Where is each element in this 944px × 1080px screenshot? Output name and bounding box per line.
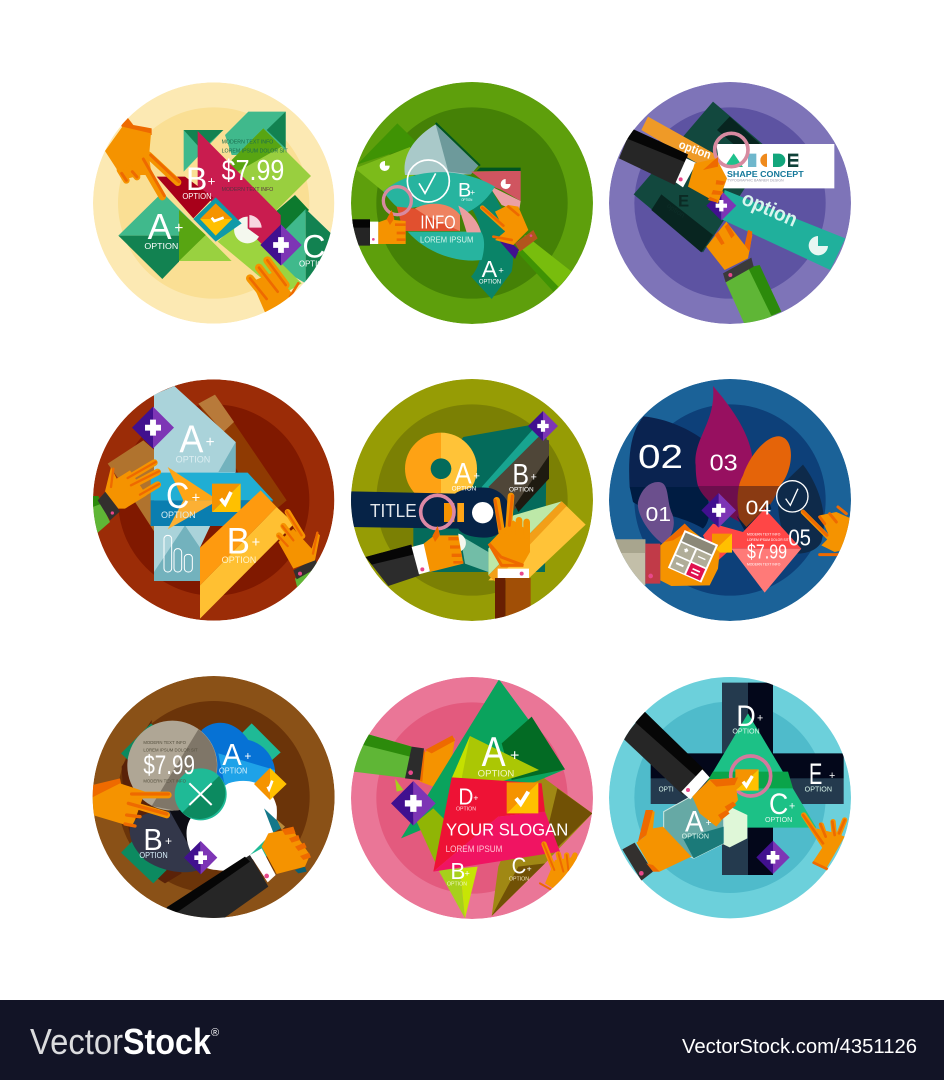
footer bar — [0, 1000, 944, 1080]
text labels: A — [454, 458, 472, 491]
blue band — [151, 473, 273, 526]
navy petal 02 — [629, 416, 709, 529]
text labels: B — [143, 823, 163, 857]
text labels — [659, 700, 835, 840]
top left folded band — [356, 124, 416, 192]
text labels: + — [527, 864, 532, 874]
text labels: E — [809, 758, 822, 791]
hand: top left pointing — [105, 118, 179, 197]
hand: left green sleeve — [88, 462, 159, 534]
text labels: C — [302, 229, 325, 265]
dark green square — [634, 102, 770, 252]
text labels: + — [206, 434, 215, 451]
text labels: C — [166, 475, 189, 516]
teal A+ strip — [471, 190, 513, 299]
text labels: A — [179, 418, 204, 462]
orange ribbon: option — [677, 137, 713, 162]
hand: black sleeve — [623, 712, 738, 827]
footer brand logo: Vector — [30, 1021, 123, 1062]
text labels: LOREM IPSUM DOLOR SIT — [222, 148, 288, 154]
panel: light blue circle with cross and triangle — [609, 676, 851, 918]
text labels: OPTION — [182, 192, 212, 201]
background disc — [93, 379, 334, 621]
panel: green circle with INFO leaves — [351, 82, 593, 324]
beige sleeve and red cuff — [610, 539, 660, 585]
text labels: OPTION — [139, 851, 168, 860]
crimson and green ribbon — [157, 131, 302, 295]
text labels: OPTION — [509, 486, 534, 493]
hand: bottom left — [622, 810, 691, 881]
magnifier ring — [715, 133, 748, 167]
text labels: OPTION — [176, 455, 210, 465]
text labels: B — [512, 458, 529, 491]
diamond C+ — [280, 209, 331, 283]
calculator — [668, 530, 718, 583]
grey petal — [404, 123, 480, 175]
text labels: D — [736, 700, 756, 733]
grey circle — [127, 721, 217, 811]
text labels: MODERN TEXT INFO — [222, 187, 273, 193]
icon: plus diamond — [528, 411, 558, 441]
text labels: 01 — [646, 503, 671, 526]
maroon petal 03 — [695, 386, 753, 522]
text labels: B — [458, 181, 471, 202]
hand: lower right — [540, 843, 578, 892]
icon: check square — [212, 484, 241, 512]
text labels: + — [531, 471, 537, 483]
diamond A+ — [118, 192, 206, 279]
red diamond — [703, 504, 801, 593]
navy TITLE banner: TITLE — [370, 500, 417, 521]
orange arrow — [168, 467, 218, 529]
icon: check square — [735, 769, 759, 791]
text labels: + — [789, 800, 795, 812]
green triangle — [680, 713, 816, 828]
background disc — [93, 676, 335, 918]
tan back band — [108, 440, 157, 535]
white half circle — [458, 534, 466, 552]
text labels: OPTI — [659, 786, 674, 793]
text labels — [139, 738, 251, 860]
background disc — [351, 379, 593, 621]
icon: plus diamond — [132, 407, 174, 449]
text labels: OPTION — [299, 260, 329, 269]
icon: plus diamond — [260, 224, 302, 266]
text labels: + — [165, 834, 172, 848]
hand: right pointing with green sleeve — [482, 205, 572, 292]
icon: plus diamond — [706, 191, 736, 221]
text labels: B — [186, 161, 207, 197]
teal ribbon: option — [738, 187, 801, 232]
text labels: A — [482, 728, 506, 775]
hand: right green sleeve — [278, 511, 325, 592]
green back shapes — [179, 112, 311, 261]
text labels — [446, 728, 568, 887]
background disc — [609, 676, 851, 918]
hand: right pointing — [803, 507, 851, 555]
text labels: + — [464, 869, 470, 879]
text labels: B — [450, 858, 465, 884]
hand with black sleeve and pen — [167, 827, 311, 923]
text labels: B — [227, 521, 250, 562]
hand: green sleeve — [706, 222, 781, 328]
lime triangles — [417, 736, 539, 918]
text labels: INFO — [420, 212, 456, 233]
text labels: OPTION — [509, 876, 529, 882]
big green triangle — [401, 679, 565, 838]
background disc — [609, 82, 851, 324]
text labels: OPTION — [765, 817, 792, 824]
text labels: OPTION — [144, 241, 178, 251]
text labels: + — [706, 818, 712, 829]
text labels: + — [498, 265, 504, 275]
icon: plus diamond large — [391, 781, 436, 826]
brown triangles — [492, 773, 592, 916]
text labels: MODERN TEXT INFO — [143, 779, 186, 785]
text labels: + — [192, 491, 200, 507]
text labels: 03 — [710, 450, 738, 476]
text labels: LOREM IPSUM — [420, 236, 473, 245]
hand: black sleeve thumbs up — [366, 526, 463, 586]
icon: bar pills — [164, 535, 192, 572]
panel: purple circle with shape concept banner — [609, 82, 851, 328]
text labels: + — [473, 793, 478, 803]
text labels: LOREM IPSUM DOLOR SIT — [143, 748, 198, 754]
text labels: $7.99 — [222, 155, 284, 187]
panel: brown circle with blobs — [92, 676, 335, 923]
text labels: MODERN TEXT INFO — [747, 563, 780, 567]
background disc — [351, 677, 593, 919]
salmon INFO panel — [397, 204, 460, 231]
dark teal back panel — [413, 424, 547, 572]
icon: white check ring — [407, 160, 449, 202]
green sleeve — [353, 733, 424, 780]
text labels: $7.99 — [747, 542, 787, 564]
icon: check ring — [777, 481, 808, 512]
hand: left with black sleeve — [352, 210, 406, 246]
panel: olive circle with TITLE banner — [351, 379, 593, 621]
blue blob — [198, 723, 275, 787]
pink petal — [458, 206, 481, 232]
teal leaf top — [383, 172, 495, 215]
magnifier ring — [731, 756, 771, 796]
teal diagonal band — [482, 427, 542, 497]
navy TITLE banner — [351, 488, 510, 538]
footer brand logo — [30, 1021, 219, 1062]
text labels: D — [458, 784, 473, 810]
text labels: LOREM IPSUM DOLOR SIT — [747, 538, 789, 542]
text labels: OPTION — [452, 486, 477, 493]
taupe band — [488, 437, 549, 512]
text labels: OPTION — [732, 728, 760, 735]
magnifier ring — [383, 187, 411, 215]
icon: pie chart — [234, 215, 262, 243]
text labels: OPTION — [479, 279, 501, 285]
icon: plus diamond — [701, 493, 736, 528]
background disc — [609, 379, 851, 621]
text labels: OPTION — [478, 769, 514, 779]
hand: black sleeve — [619, 128, 727, 203]
text labels: + — [470, 188, 475, 197]
footer brand logo: Stock — [123, 1021, 212, 1062]
text labels: A — [222, 738, 242, 772]
red corner panel — [471, 168, 521, 212]
icon: X circle — [175, 768, 227, 820]
text labels: OPTION — [447, 881, 467, 887]
dark cross — [651, 683, 844, 875]
text labels: + — [510, 748, 519, 765]
pale blue panel — [154, 386, 236, 581]
text labels: A — [148, 206, 172, 247]
icon: check diamond — [193, 197, 242, 242]
text labels: OPTION — [219, 766, 248, 775]
dark letter E option: E — [678, 192, 689, 211]
dark letter E option — [670, 195, 688, 216]
icon: check diamond — [254, 768, 287, 800]
white banner: shape concept: SHAPE CONCEPT — [727, 170, 804, 179]
purple petal 01 — [638, 482, 674, 545]
footer image id: VectorStock.com/4351126 — [682, 1035, 917, 1058]
text labels — [638, 439, 811, 567]
text labels: MODERN TEXT INFO — [143, 740, 186, 746]
text labels — [420, 181, 504, 285]
text labels: + — [829, 770, 835, 782]
text labels: OPTION — [456, 807, 476, 813]
text labels: A — [482, 256, 498, 282]
magnifier ring — [421, 495, 454, 529]
panel: blue circle with numbered petals — [609, 379, 851, 621]
icon: plus diamond — [756, 841, 790, 874]
text labels: OPTION — [161, 510, 196, 520]
text labels — [161, 418, 260, 565]
text labels: + — [244, 749, 251, 763]
text labels: A — [685, 805, 704, 838]
text labels: C — [769, 788, 788, 821]
red panel — [433, 777, 560, 872]
hand: left pointing — [92, 778, 168, 827]
teal ribbon — [720, 187, 845, 270]
white banner: shape concept — [716, 144, 834, 188]
hand: peace sign brown sleeve — [489, 496, 531, 620]
donut chart — [405, 433, 477, 505]
teal shape under pen — [250, 840, 268, 857]
icon: check square — [712, 534, 732, 553]
white banner: shape concept: TYPOGRAPHIC BANNER DESIGN — [727, 179, 784, 183]
pale hexagon — [721, 807, 747, 847]
brown back band — [198, 395, 287, 519]
text labels: C — [512, 852, 526, 878]
icon: check square — [507, 782, 538, 813]
panel: cream circle with diamonds and $7.99 — [93, 82, 334, 324]
hand: right pointing — [803, 815, 845, 869]
light teal and green boxes — [460, 501, 586, 581]
text labels: OPTION — [682, 833, 709, 840]
green tab shapes — [121, 723, 281, 883]
white blob — [187, 781, 277, 871]
text labels: MODERN TEXT INFO — [747, 532, 780, 536]
text labels: 05 — [788, 524, 811, 550]
text labels: LOREM IPSUM — [446, 844, 502, 854]
text labels — [144, 139, 329, 269]
background disc — [93, 82, 334, 324]
lime shard — [395, 778, 403, 792]
right dark petal 05 — [778, 465, 824, 554]
background disc — [351, 82, 593, 324]
panel: pink circle with YOUR SLOGAN — [351, 677, 593, 919]
icon: plus diamond — [184, 841, 217, 874]
hand holding calculator — [660, 524, 720, 586]
teal leaf bottom — [408, 232, 484, 261]
text labels: 04 — [746, 497, 771, 520]
hand behind triangle — [418, 735, 455, 787]
text labels — [452, 458, 537, 493]
text labels: OPTION — [461, 197, 472, 202]
text labels: YOUR SLOGAN — [446, 820, 568, 840]
dark blob — [130, 803, 198, 872]
text labels: + — [208, 174, 216, 189]
text labels: OPTION — [222, 555, 256, 565]
text labels: 02 — [638, 439, 683, 476]
hexagon A+ — [664, 795, 724, 858]
text labels: OPTION — [805, 786, 832, 793]
orange ribbon — [641, 116, 718, 163]
dark letter E option: option — [665, 201, 687, 220]
pen — [264, 808, 307, 873]
text labels: + — [473, 470, 480, 482]
hand: bottom right — [250, 260, 298, 312]
text labels: + — [252, 535, 260, 551]
text labels: $7.99 — [143, 750, 195, 780]
text labels: MODERN TEXT INFO — [222, 139, 273, 145]
text labels: + — [174, 220, 183, 237]
footer brand logo: ® — [211, 1027, 219, 1039]
orange petal 04 — [737, 436, 791, 530]
yellow ribbon B+ — [200, 490, 294, 619]
text labels: + — [757, 713, 763, 725]
panel: red-brown circle with A+ C+ B+ arrows — [88, 379, 334, 621]
